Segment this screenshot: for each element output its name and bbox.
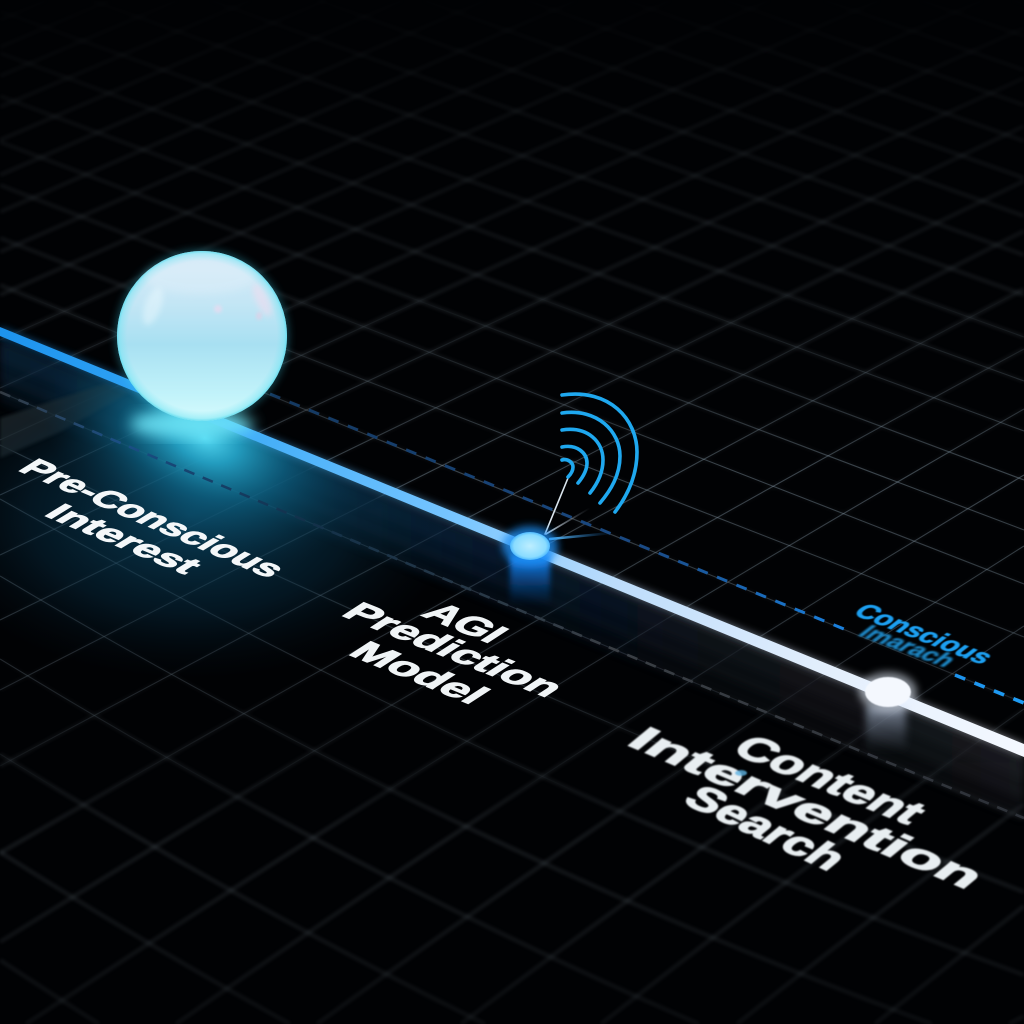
upper dashed track: [270, 394, 1024, 703]
label: AGI Prediction Model: AGI: [414, 597, 518, 648]
glow band beneath the timeline: [0, 340, 1024, 809]
label: Conscious Imarach: Imarach: [852, 622, 962, 671]
label: Content Intervention Search: Content: [723, 728, 937, 831]
label: Pre-Conscious Interest: Interest: [36, 499, 211, 579]
label: Conscious Imarach: Conscious: [847, 599, 1001, 668]
label: Pre-Conscious Interest: Pre-Conscious: [10, 454, 295, 582]
label: Content Intervention Search: Search: [674, 779, 857, 878]
label: Content Intervention Search: Intervention: [617, 721, 995, 896]
timeline node: conscious search: [859, 672, 917, 752]
timeline node: AGI prediction model: [502, 526, 558, 605]
lower dashed track: [0, 392, 1024, 818]
main timeline: [0, 327, 1024, 757]
label: AGI Prediction Model: Model: [341, 636, 499, 709]
label: Content Intervention Search: [617, 721, 995, 896]
glowing sphere: pre-conscious interest: [115, 249, 289, 438]
signal icon with antenna rays: [545, 394, 637, 539]
label: AGI Prediction Model: Prediction: [333, 597, 575, 702]
